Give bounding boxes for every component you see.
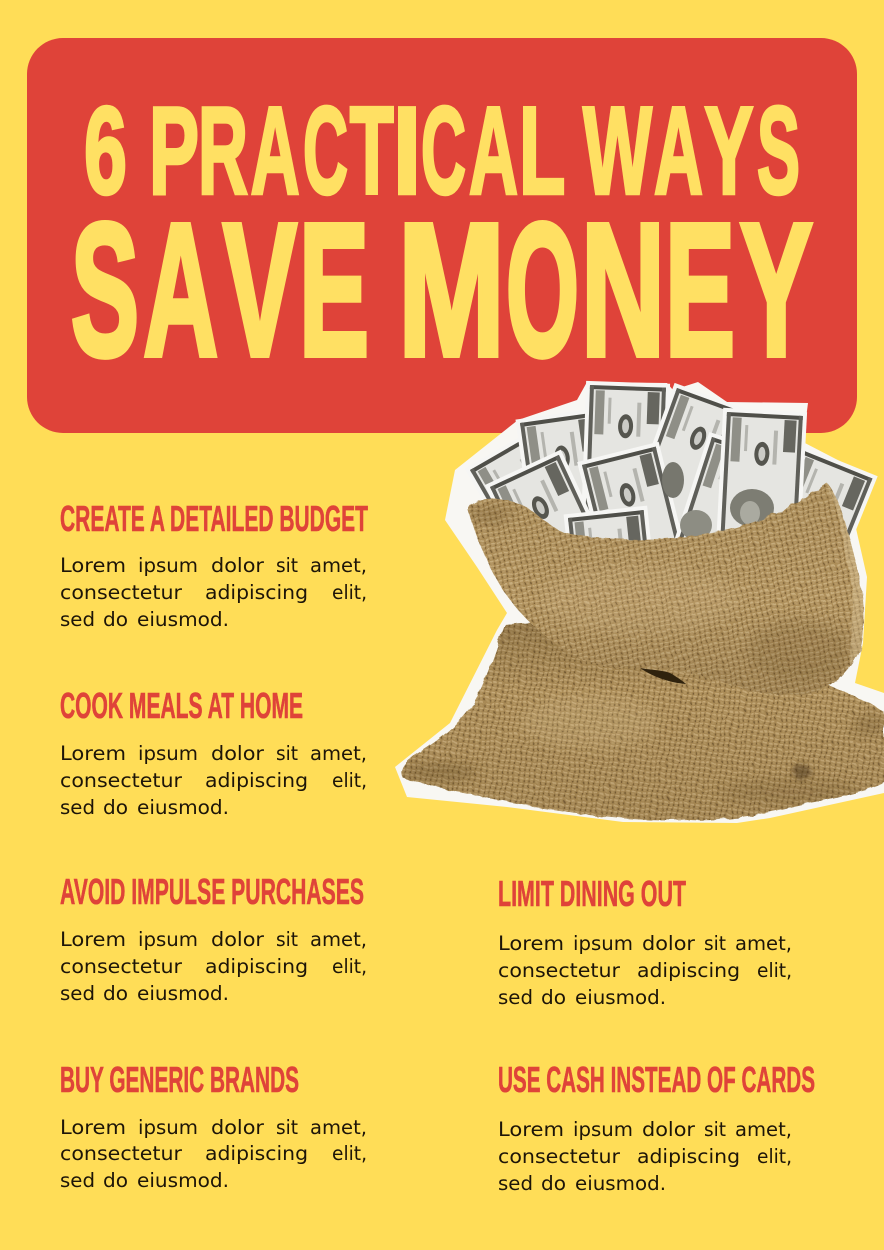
tip: avoid impulse purchases [60,871,367,1005]
title line: 6 practical ways: L [519,82,564,220]
tip: use cash instead of cards: do [541,1172,566,1195]
tip: buy generic brands: eiusmod. [137,1169,229,1192]
tip: create a detailed budget: do [103,608,128,631]
title line: save money: N [581,185,665,396]
title line: 6 practical ways: R [198,82,248,220]
tip: cook meals at home: consectetur [60,769,183,792]
tip: create a detailed budget: eiusmod. [137,608,229,631]
tip: cook meals at home: sit [276,742,298,765]
tip: cook meals at home: ipsum [138,742,198,765]
tip: create a detailed budget: sit [276,554,298,577]
tip: limit dining out: do [541,986,566,1009]
tip: cook meals at home: eiusmod. [137,796,229,819]
title line: 6 practical ways: C [303,82,348,220]
tip: create a detailed budget: sed [60,608,95,631]
title line: 6 practical ways: A [251,82,300,220]
tip: avoid impulse purchases: ipsum [138,928,198,951]
tip: buy generic brands: Lorem [60,1116,126,1139]
tip: cook meals at home [60,685,367,819]
tip: buy generic brands: amet, [310,1116,367,1139]
title line: 6 practical ways: P [149,82,199,220]
tip: create a detailed budget: adipiscing [205,581,308,604]
tip: use cash instead of cards: Lorem [498,1118,564,1141]
tip: limit dining out: elit, [757,959,792,982]
tip: use cash instead of cards: consectetur [498,1145,621,1168]
title line: save money: E [299,185,369,396]
illustration: burlap sack of money [395,381,884,823]
tip: limit dining out: consectetur [498,959,621,982]
tip: buy generic brands: sed [60,1169,95,1192]
tip: create a detailed budget: CREATE A DETAILED BUDGET [60,498,368,539]
tip: avoid impulse purchases: amet, [310,928,367,951]
title line: 6 practical ways: C [421,82,466,220]
tip: use cash instead of cards: amet, [735,1118,792,1141]
tip: avoid impulse purchases: sit [276,928,298,951]
title line: 6 practical ways: A [469,82,518,220]
tip: cook meals at home: sed [60,796,95,819]
title line: 6 practical ways: W [583,82,652,220]
tip: create a detailed budget: Lorem [60,554,126,577]
tip: buy generic brands: BUY GENERIC BRANDS [60,1059,299,1100]
title line: 6 practical ways: T [350,82,394,220]
tip: limit dining out: sed [498,986,533,1009]
title line: 6 practical ways: S [757,82,800,220]
title line: 6 practical ways: I [392,82,422,220]
tip: buy generic brands: sit [276,1116,298,1139]
title line: 6 practical ways: A [654,82,703,220]
tip: limit dining out: eiusmod. [575,986,666,1009]
tip: cook meals at home: adipiscing [205,769,308,792]
tip: buy generic brands: adipiscing [205,1142,308,1165]
title banner [27,38,857,433]
title line: 6 practical ways: Y [704,82,753,220]
tip: limit dining out: ipsum [573,932,633,955]
tip: limit dining out: adipiscing [637,959,740,982]
title line: save money: O [506,185,579,396]
tip: cook meals at home: do [103,796,128,819]
tip: avoid impulse purchases: adipiscing [205,955,308,978]
tip: avoid impulse purchases: AVOID IMPULSE PURCHASES [60,871,364,912]
tip: create a detailed budget: consectetur [60,581,183,604]
tip: use cash instead of cards [498,1059,815,1195]
title line: save money: E [665,185,735,396]
tip: avoid impulse purchases: do [103,982,128,1005]
tip: use cash instead of cards: eiusmod. [575,1172,666,1195]
tip: cook meals at home: COOK MEALS AT HOME [60,685,303,726]
title line: save money: V [223,185,297,396]
tip: cook meals at home: elit, [332,769,367,792]
tip: use cash instead of cards: sed [498,1172,533,1195]
tip: limit dining out: Lorem [498,932,564,955]
tip: create a detailed budget [60,498,368,631]
tip: use cash instead of cards: ipsum [573,1118,633,1141]
tip: buy generic brands: elit, [332,1142,367,1165]
title line: save money: M [398,185,505,396]
tip: avoid impulse purchases: elit, [332,955,367,978]
tip: buy generic brands: do [103,1169,128,1192]
tip: avoid impulse purchases: sed [60,982,95,1005]
tip: limit dining out: dolor [642,932,696,955]
tip: use cash instead of cards: dolor [642,1118,696,1141]
tip: create a detailed budget: amet, [310,554,367,577]
tip: limit dining out: LIMIT DINING OUT [498,873,686,914]
title line: save money: S [71,185,139,396]
tip: use cash instead of cards: sit [704,1118,726,1141]
tip: cook meals at home: amet, [310,742,367,765]
tip: avoid impulse purchases: dolor [211,928,265,951]
tip: limit dining out [498,873,792,1009]
banknotes [465,381,878,652]
tip: use cash instead of cards: adipiscing [637,1145,740,1168]
tip: buy generic brands: consectetur [60,1142,183,1165]
tip: cook meals at home: Lorem [60,742,126,765]
tip: buy generic brands: ipsum [138,1116,198,1139]
tip: avoid impulse purchases: consectetur [60,955,183,978]
tip: buy generic brands: dolor [211,1116,265,1139]
tip: limit dining out: sit [704,932,726,955]
title line: save money: Y [740,185,812,396]
tip: avoid impulse purchases: Lorem [60,928,126,951]
title line: save money: A [144,185,218,396]
sack upper fold [468,483,864,695]
dark crease between folds [640,668,686,684]
tip: create a detailed budget: ipsum [138,554,198,577]
sack lower body [401,620,884,820]
paper cut-out outline [395,382,884,823]
tip: buy generic brands [60,1059,367,1192]
title line: 6 practical ways: 6 [84,82,127,220]
tip: cook meals at home: dolor [211,742,265,765]
tip: avoid impulse purchases: eiusmod. [137,982,229,1005]
tip: use cash instead of cards: elit, [757,1145,792,1168]
tip: create a detailed budget: dolor [211,554,265,577]
tip: limit dining out: amet, [735,932,792,955]
tip: create a detailed budget: elit, [332,581,367,604]
